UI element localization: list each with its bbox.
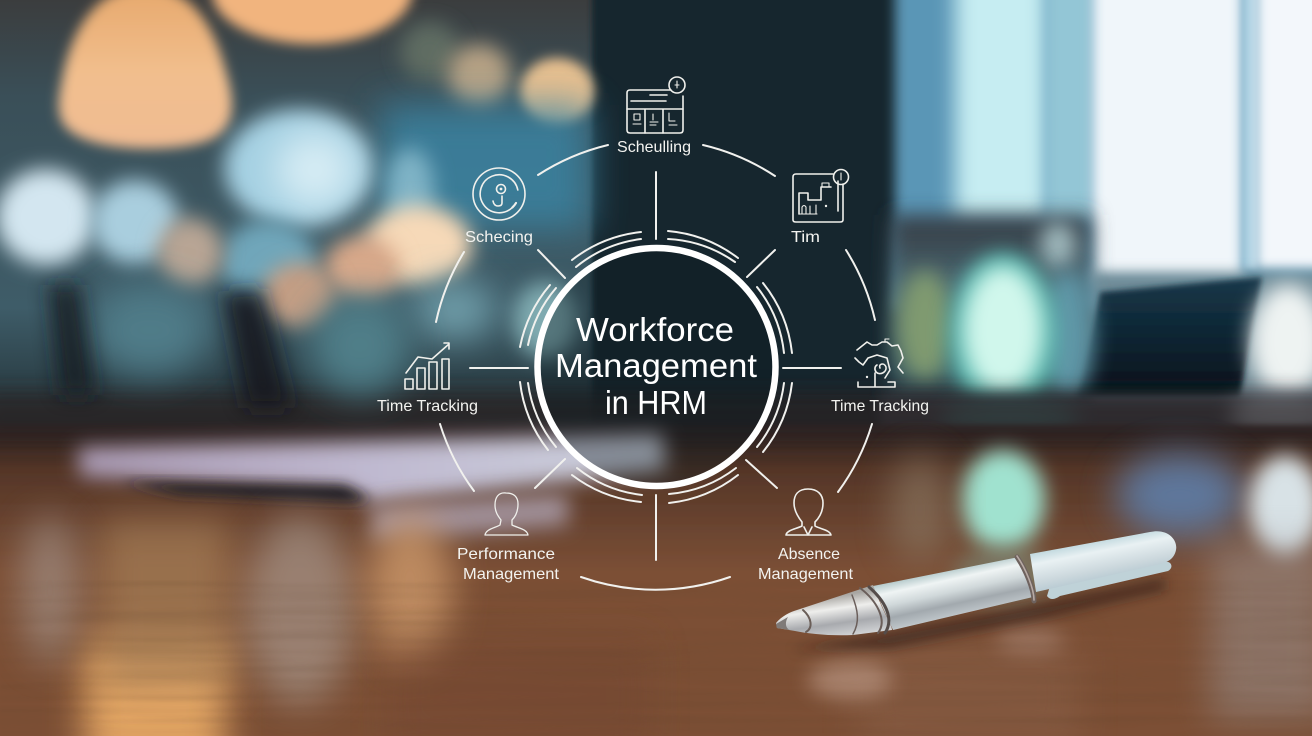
label: Performance bbox=[457, 546, 555, 563]
icon: person outline bbox=[485, 493, 528, 535]
notebook on table bbox=[78, 434, 666, 542]
node: Scheulling bbox=[617, 77, 691, 156]
spokes bbox=[470, 172, 841, 560]
right desk band bbox=[880, 396, 1312, 442]
pen cap bbox=[1030, 531, 1176, 592]
node: Tim bbox=[791, 170, 848, 246]
table surface bbox=[0, 425, 1312, 736]
pen shadow bbox=[790, 578, 1165, 650]
label: Time Tracking bbox=[377, 398, 478, 415]
central hub bbox=[538, 248, 776, 486]
node: Time Tracking right bbox=[831, 339, 929, 415]
pen tip section bbox=[776, 585, 892, 635]
white glow right bbox=[1250, 284, 1312, 400]
node: Time Tracking left bbox=[377, 343, 478, 415]
label: Absence bbox=[778, 546, 840, 563]
label: Time Tracking bbox=[831, 398, 929, 415]
title: Workforce bbox=[576, 312, 734, 349]
node: Absence Management bbox=[758, 489, 854, 583]
table reflections bbox=[20, 450, 1312, 736]
dark centre panel bbox=[592, 0, 900, 440]
outer ring arcs bbox=[436, 145, 875, 590]
title: in HRM bbox=[605, 385, 707, 422]
label: Schecing bbox=[465, 229, 533, 246]
title: Management bbox=[555, 348, 758, 385]
title bbox=[555, 312, 758, 422]
icon: abstract tree clock bbox=[855, 339, 903, 387]
wood grain bbox=[0, 580, 1312, 736]
wall left bbox=[0, 0, 620, 440]
diagram: workforce management wheel bbox=[377, 77, 929, 590]
label: Tim bbox=[791, 229, 820, 246]
pen bbox=[776, 531, 1176, 650]
icon: person with collar bbox=[786, 489, 831, 535]
icon: target dial bbox=[473, 168, 525, 220]
dark chair silhouettes bbox=[48, 285, 292, 408]
node: Performance Management bbox=[457, 493, 560, 583]
label: Scheulling bbox=[617, 139, 691, 156]
icon: document chart bbox=[793, 170, 848, 222]
green and mint glows bbox=[897, 270, 953, 380]
far table edge shadow bbox=[0, 392, 1312, 444]
icon: calendar bbox=[627, 77, 685, 133]
icon: bar chart with arrow bbox=[405, 343, 449, 389]
pen dark nib bbox=[776, 617, 790, 630]
small bokeh lights bbox=[0, 22, 594, 395]
right windows bbox=[890, 0, 1312, 420]
pen barrel bbox=[873, 557, 1033, 630]
label bbox=[758, 546, 854, 583]
label bbox=[457, 546, 560, 583]
overhead lamps bbox=[59, 0, 232, 148]
pen rings bbox=[803, 556, 1034, 634]
double arcs around hub bbox=[520, 231, 792, 503]
node: Schecing bbox=[465, 168, 533, 246]
pen clip bbox=[1047, 562, 1171, 599]
label: Management bbox=[758, 566, 854, 583]
laptop / chair dark shape bbox=[1076, 277, 1262, 398]
hub fill and ring bbox=[538, 248, 776, 486]
label: Management bbox=[463, 566, 560, 583]
